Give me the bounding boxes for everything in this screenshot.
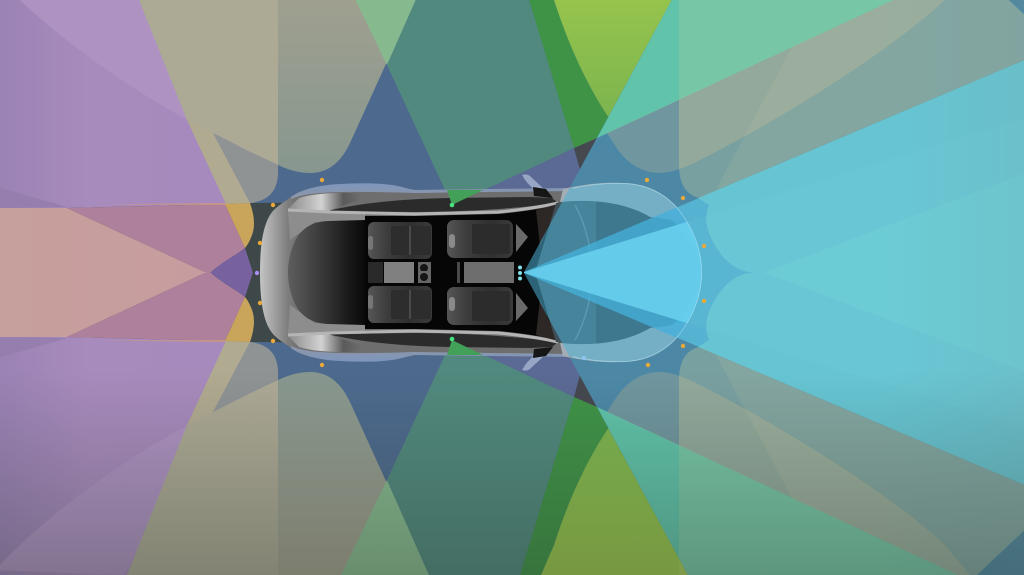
- front console side: [457, 262, 460, 274]
- dark mirror stalk: [533, 187, 553, 198]
- rear shoulder highlight: [287, 193, 362, 211]
- beam: lighter diagonal overlay: [716, 0, 1024, 190]
- car half: mirrored lower side: [260, 271, 1024, 575]
- beam: blue ultrasonic band beside car: [250, 0, 600, 203]
- beam: rear light pink zone: [0, 208, 207, 273]
- beam: lime zone: [541, 0, 688, 118]
- rear console tray: [384, 262, 414, 274]
- ultrasonic sensors: front right group: [645, 178, 706, 367]
- outer glass edge: [573, 183, 702, 273]
- narrow cone tint: [524, 222, 702, 323]
- grey frame behind roof: [288, 211, 365, 240]
- beam: grey overlap triangle: [213, 133, 278, 203]
- beam: orange overlap: [225, 203, 254, 248]
- side mirror: [522, 174, 544, 190]
- beam: side panel grey-beige: [278, 0, 429, 173]
- medium cone tint: [524, 208, 686, 338]
- bright sill line: [288, 203, 558, 214]
- beam: slate wedge: [452, 148, 582, 205]
- beam: top-right corner: [977, 0, 1024, 20]
- front seat: [447, 220, 513, 258]
- beam: rounded overlay front panel below mint: [679, 0, 1024, 198]
- rear seat inner cushion: [391, 226, 431, 255]
- ultrasonic sensors: rear left group: [258, 178, 324, 367]
- rear console side: [368, 262, 383, 274]
- black cabin interior: [365, 205, 558, 273]
- sensor beams: top half: [0, 0, 1024, 273]
- beam: teal side camera cone: [387, 0, 574, 205]
- rear camera dot: [255, 271, 259, 275]
- beam: far-right fade: [880, 0, 1024, 273]
- side camera dots: [450, 203, 454, 341]
- beam: rounded overlay side panel: [607, 0, 970, 173]
- car body shell: [260, 183, 573, 273]
- rear seat cushion line: [409, 226, 411, 255]
- front console: [464, 262, 514, 274]
- beam: rounded overlay front panel on mint: [679, 0, 958, 100]
- beam: cyan main front cone: [524, 45, 1024, 273]
- beam: thin light seam on rear band: [100, 203, 226, 205]
- car: top-down view: [260, 174, 702, 371]
- green side beam over car: [447, 190, 483, 205]
- forward camera dots: [518, 266, 522, 280]
- front beam over car: [524, 183, 702, 362]
- sensor dots: [255, 178, 706, 367]
- beam: purple diamond behind rear bumper: [207, 248, 253, 273]
- beam: light green overlap: [341, 0, 429, 65]
- beam: cyan rounded panel: [698, 45, 1024, 273]
- front seat outer bolster: [449, 234, 455, 248]
- cup holder panel: [418, 262, 431, 274]
- windshield frame: [536, 204, 558, 246]
- beam: rear dark pink band: [67, 204, 245, 273]
- dark door-sill strip: [328, 197, 558, 212]
- windshield arcs: [575, 205, 592, 273]
- blue trim on rear shoulder: [291, 183, 573, 199]
- glass front hood highlight band: [560, 183, 689, 226]
- rear window: [288, 220, 365, 273]
- rear seat outer bolster: [368, 236, 373, 250]
- beam: wide front camera blue band: [524, 0, 1024, 272]
- hood dark body: [596, 197, 702, 273]
- beam: dark wedge: [574, 138, 597, 170]
- shading: bottom darkening over beams: [0, 370, 1024, 575]
- beam: cyan crossing band: [763, 160, 1024, 273]
- windshield area: [535, 197, 600, 273]
- beam: lighter rear side zone: [0, 0, 213, 133]
- beam: beige side panel: [127, 0, 278, 165]
- beam: mint overlap: [597, 0, 958, 138]
- cup holder: [420, 264, 428, 272]
- beam: beige strip: [187, 120, 250, 204]
- beam: narrow forward cone: [524, 107, 1024, 273]
- sensor beams: mirrored bottom half: [0, 272, 1024, 575]
- beam: dark green overlap: [520, 0, 609, 148]
- beam: rear purple camera zone: [0, 0, 260, 208]
- wide cone tint: [524, 183, 686, 362]
- front seat headrest: [516, 224, 528, 252]
- radar dot: [582, 356, 586, 360]
- beam: darker purple strip at rear: [0, 186, 67, 208]
- front seat inner cushion: [472, 224, 510, 254]
- car half: upper side: [260, 174, 702, 371]
- rear seat: [368, 222, 432, 259]
